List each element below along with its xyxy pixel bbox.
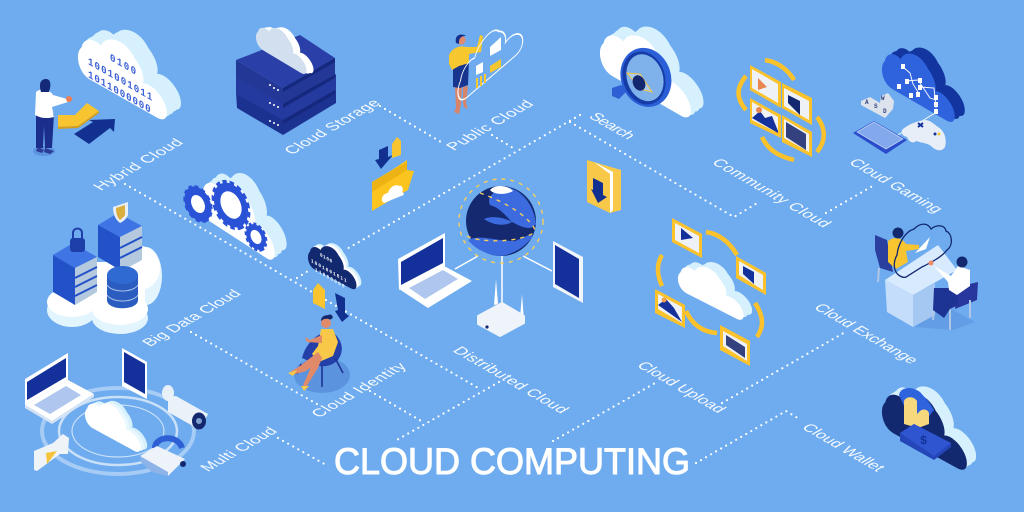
label: Cloud Exchange: Cloud Exchange (810, 301, 922, 367)
icon: seated woman with small cloud: 1001001011 (311, 258, 347, 284)
icon: seated woman with small cloud: 11000000 (315, 267, 345, 290)
icon: cloud gaming: W (881, 95, 885, 102)
icon: globe network (398, 179, 583, 336)
icon: cloud exchange desk (875, 224, 978, 330)
icon: cloud storage servers (236, 10, 336, 135)
icon: downloadable document (587, 160, 621, 213)
icon: folder with arrows (372, 137, 414, 211)
icon: cloud gaming: A (865, 99, 869, 106)
icon: cloud gaming: D (883, 108, 887, 115)
label: Distributed Cloud: Distributed Cloud (449, 344, 572, 416)
label: Cloud Identity: Cloud Identity (308, 360, 411, 420)
label: Public Cloud: Public Cloud (443, 98, 538, 153)
icon: cloud gaming: S (874, 103, 878, 110)
label: Hybrid Cloud: Hybrid Cloud (90, 136, 188, 193)
icon: cloud wallet (882, 362, 976, 479)
icon: cloud gaming (853, 24, 965, 154)
icon: community cloud tiles (738, 60, 824, 160)
icon: search cloud (600, 0, 704, 129)
icon: public cloud presenter (449, 5, 523, 114)
icon: seated woman with small cloud: 0100 (320, 252, 332, 265)
icon: gears cloud (180, 145, 287, 271)
icon: big data cloud (47, 202, 162, 334)
label: Cloud Upload: Cloud Upload (633, 359, 730, 416)
icon: cloud wallet: $ (920, 434, 927, 448)
icon: hybrid cloud: 1001001011 (88, 56, 152, 105)
icon: cloud upload (655, 218, 766, 366)
label: Multi Cloud: Multi Cloud (197, 425, 282, 474)
label: Big Data Cloud: Big Data Cloud (139, 287, 245, 349)
label: Cloud Wallet: Cloud Wallet (798, 421, 889, 474)
label: Cloud Gaming: Cloud Gaming (845, 156, 947, 216)
icon: multi cloud (25, 348, 208, 476)
label: Search: Search (585, 110, 639, 142)
icon: seated woman with small cloud (288, 230, 361, 393)
label: Cloud Storage: Cloud Storage (281, 97, 385, 157)
title: CLOUD COMPUTING (334, 441, 690, 482)
icon: hybrid cloud: 1011000000 (88, 69, 151, 117)
icon: hybrid cloud: 0100 (110, 52, 136, 79)
label: Community Cloud: Community Cloud (708, 156, 835, 230)
dotted connector lines (125, 106, 876, 466)
icon: hybrid cloud (33, 0, 181, 156)
